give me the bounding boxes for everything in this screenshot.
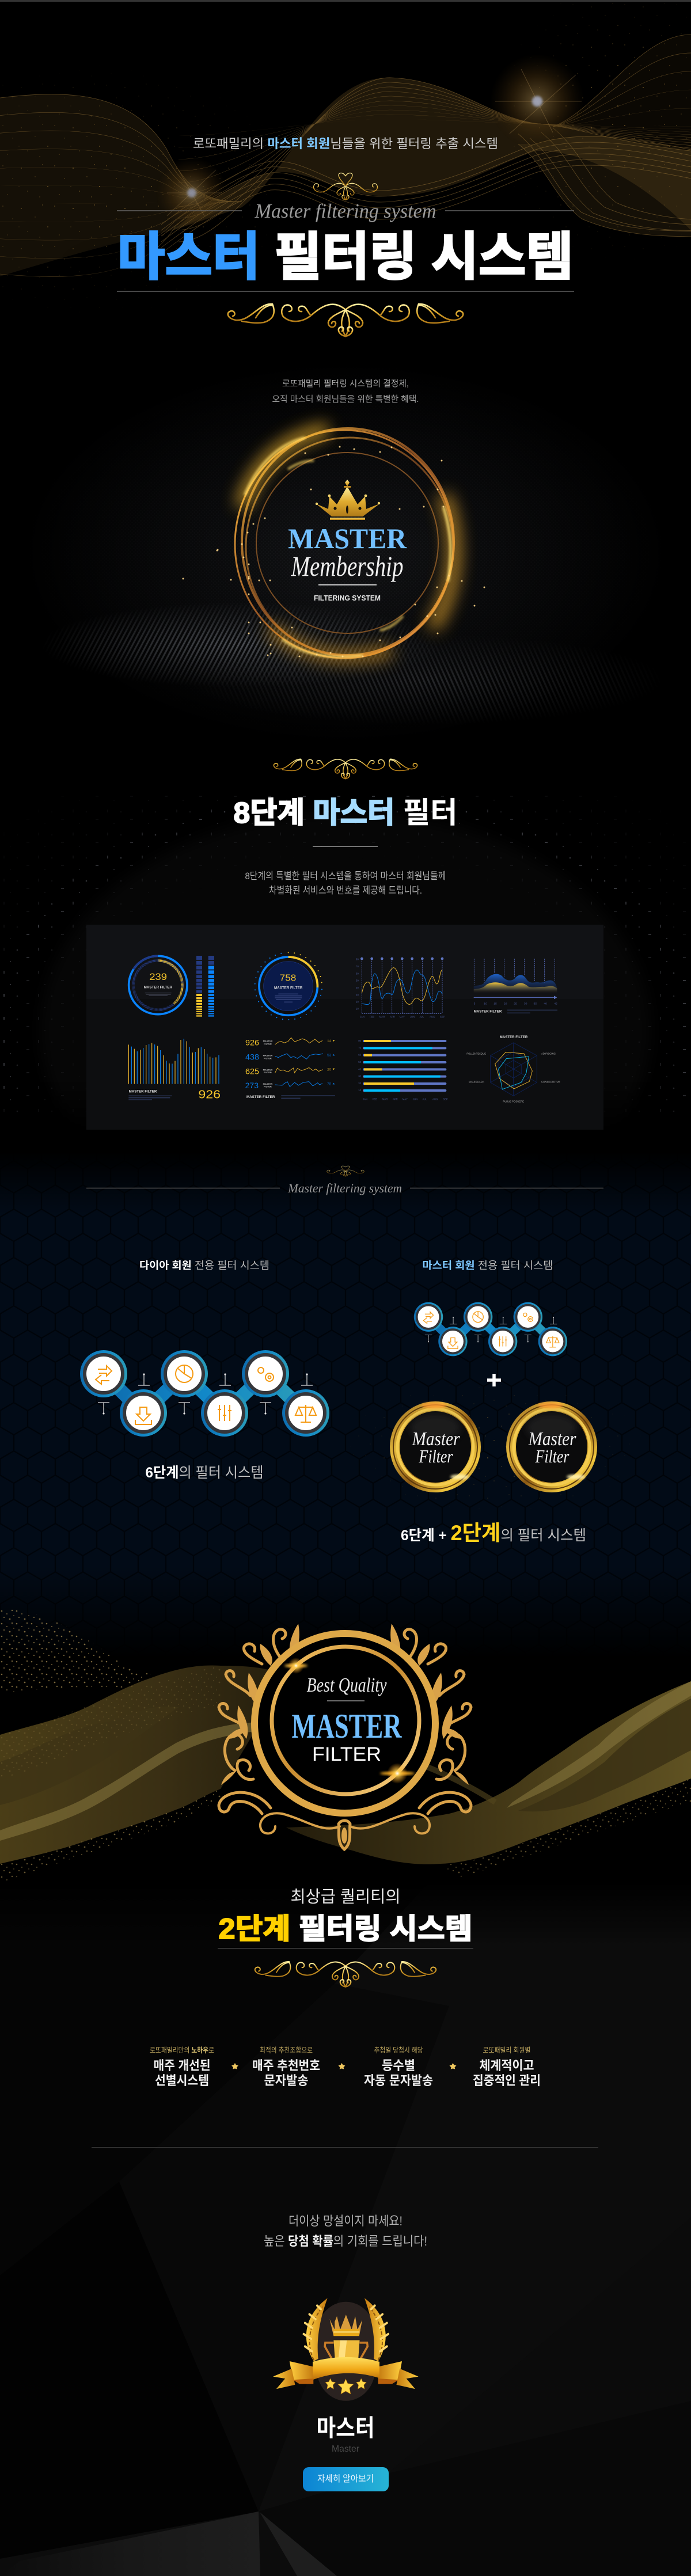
feature: automatic rank messages <box>364 2046 433 2088</box>
laurel wreath <box>303 2298 388 2361</box>
sparklines: 926 <box>245 1038 259 1047</box>
heading: master member filter: 마스터 회원 전용 필터 시스템 <box>423 1260 553 1271</box>
medallion: Master Filter right: Filter <box>535 1446 569 1466</box>
donut gauge 758: 758 <box>280 974 296 983</box>
gold ribbon waves <box>0 1606 691 1883</box>
icon: star <box>449 2063 456 2069</box>
label: Master: Master <box>332 2444 360 2454</box>
sparklines: MASTER <box>263 1040 273 1043</box>
medallion: Master Filter left: Filter <box>419 1446 453 1466</box>
Best Quality: Best Quality <box>306 1674 387 1696</box>
feature: weekly numbers: 문자발송 <box>264 2073 309 2088</box>
radar chart: MASTER FILTER <box>500 1035 528 1039</box>
heading: diamond member filter: 다이아 회원 전용 필터 시스템 <box>139 1260 269 1271</box>
sparklines: 78 <box>327 1082 332 1086</box>
multi-line chart: SEP <box>440 1016 445 1019</box>
multi-line chart: 40 <box>356 986 359 989</box>
subtitle: Master filtering system: Master filtering system <box>255 200 436 222</box>
feature: weekly improved selection: 매주 개선된 <box>153 2058 211 2073</box>
frame flourishes <box>219 1624 471 1849</box>
crown <box>316 480 380 520</box>
sparklines: FILTER <box>264 1085 272 1088</box>
light flare left <box>156 157 227 229</box>
description paragraph: 8단계의 특별한 필터 시스템을 통하여 마스터 회원님들께 <box>245 871 446 882</box>
horizontal progress bars: APR <box>393 1098 398 1101</box>
heading underline <box>313 846 378 847</box>
horizontal progress bars: 70 <box>358 1046 362 1049</box>
sparklines: MASTER <box>263 1054 273 1057</box>
sparklines: MASTER FILTER <box>246 1095 275 1099</box>
call-out text: 더이상 망설이지 마세요! <box>288 2214 403 2228</box>
title underline <box>117 291 574 292</box>
feature: weekly numbers: 최적의 추천조합으로 <box>260 2046 313 2054</box>
heading: top quality: 최상급 퀄리티의 <box>290 1888 401 1906</box>
horizontal progress bars: 10 <box>358 1089 362 1092</box>
horizontal progress bars: 50 <box>358 1061 362 1063</box>
sparklines: MASTER <box>263 1068 273 1071</box>
sparks <box>183 447 484 656</box>
badge: master trophy <box>273 2298 419 2401</box>
area chart: 20 <box>504 1002 507 1006</box>
horizontal progress bars: JAN <box>363 1098 367 1101</box>
horizontal progress bars: 20 <box>358 1082 362 1085</box>
feature: systematic management <box>473 2046 541 2088</box>
vertical line bars: MASTER FILTER <box>129 1089 157 1093</box>
ornament: small gold flourish <box>314 173 377 200</box>
multi-line chart: 50 <box>356 979 359 982</box>
feature list <box>150 2046 541 2088</box>
sparkle dust around medallions <box>350 1385 630 1509</box>
feature: weekly improved selection: 선별시스템 <box>155 2073 209 2088</box>
outer oval <box>255 1633 435 1813</box>
multi-line chart: JAN <box>360 1016 365 1019</box>
ornament: small flourish <box>327 1166 364 1176</box>
logotype: Membership: Membership <box>291 550 403 582</box>
glint bottom <box>380 1763 415 1784</box>
multi-line chart: JUL <box>419 1016 424 1019</box>
diagram: small 6-step filter chain <box>414 1302 567 1356</box>
sparklines: 625 <box>245 1066 259 1076</box>
intro paragraph: membership: 로또패밀리 필터링 시스템의 결정체, <box>282 379 409 389</box>
intro paragraph: membership <box>272 379 419 404</box>
sparklines: 53 <box>327 1054 332 1058</box>
caption: 6 + 2 step filter: 6단계 + 2단계의 필터 시스템 <box>401 1521 586 1545</box>
icon: star <box>339 2063 346 2069</box>
label: 마스터: 마스터 <box>317 2415 374 2441</box>
sparklines: 273 <box>245 1081 259 1090</box>
multi-line chart <box>356 958 445 1019</box>
horizontal progress bars <box>358 1039 448 1101</box>
multi-line chart: JUN <box>410 1016 415 1019</box>
sparklines <box>245 1038 335 1099</box>
divider <box>92 2147 598 2148</box>
icon: star <box>231 2063 238 2069</box>
horizontal progress bars: 80 <box>358 1039 362 1042</box>
logotype: filtering system: FILTERING SYSTEM <box>314 594 381 602</box>
hexagon section background <box>0 1152 691 1658</box>
crown <box>329 2315 362 2336</box>
medallion: Master Filter right <box>506 1401 597 1492</box>
radar chart: POLLENTESQUE <box>466 1052 486 1055</box>
multi-line chart: AUG <box>430 1016 435 1019</box>
donut gauge 239: 239 <box>149 971 167 982</box>
radar chart: MALESUADA <box>469 1080 484 1083</box>
area chart: 10 <box>484 1002 487 1006</box>
multi-line chart: MAY <box>400 1016 405 1019</box>
area chart: 25 <box>514 1002 517 1006</box>
section: hero background with gold wave mesh <box>0 0 691 345</box>
area chart: 40 <box>544 1002 547 1006</box>
intro line: 로또패밀리의 마스터 회원님들을 위한 필터링 추출 시스템 <box>193 136 498 151</box>
feature: weekly improved selection: 로또패밀리만의 노하우로 <box>150 2046 214 2054</box>
horizontal progress bars: FEB <box>373 1098 377 1101</box>
horizontal progress bars: JUL <box>422 1098 427 1101</box>
ornament: flourish <box>255 1962 436 1987</box>
glint top <box>284 1658 307 1674</box>
caption: 6-step filter: 6단계의 필터 시스템 <box>145 1465 264 1481</box>
radar chart: ADIPISCING <box>541 1052 556 1055</box>
heading: 8단계 마스터 필터: 8단계 마스터 필터 <box>234 796 457 829</box>
multi-line chart: 70 <box>356 965 359 968</box>
donut gauge 239: MASTER FILTER <box>144 985 172 989</box>
area chart: 30 <box>524 1002 527 1006</box>
inner oval <box>272 1647 419 1794</box>
MASTER: MASTER <box>291 1707 402 1745</box>
multi-line chart: 80 <box>356 958 359 961</box>
call-out text: 높은 당첨 확률의 기회를 드립니다! <box>264 2234 427 2248</box>
logotype divider <box>318 584 377 586</box>
multi-line chart: APR <box>390 1016 395 1019</box>
feature: automatic rank messages: 추첨일 당첨시 해당 <box>374 2046 423 2054</box>
radar chart <box>466 1035 560 1103</box>
horizontal progress bars: 60 <box>358 1054 362 1057</box>
area chart <box>474 959 557 1014</box>
horizontal progress bars: 30 <box>358 1075 362 1078</box>
area chart: 15 <box>493 1002 497 1006</box>
multi-line chart: 60 <box>356 972 359 975</box>
ornament: section flourish <box>274 759 417 779</box>
feature: systematic management: 집중적인 관리 <box>473 2073 541 2088</box>
feature: automatic rank messages: 자동 문자발송 <box>364 2073 433 2088</box>
sparklines: 20 <box>327 1068 332 1072</box>
call-out text <box>264 2214 427 2248</box>
area chart: 45 <box>554 1002 557 1006</box>
button: learn more <box>303 2467 389 2491</box>
sparklines: MASTER <box>263 1082 273 1085</box>
sparklines: FILTER <box>264 1071 272 1074</box>
horizontal progress bars: SEP <box>443 1098 448 1101</box>
FILTER: FILTER <box>312 1743 381 1765</box>
left half of dashboard <box>128 952 335 1101</box>
multi-line chart: FEB <box>370 1016 374 1019</box>
button: learn more: 자세히 알아보기 <box>317 2474 374 2484</box>
feature: weekly numbers <box>252 2046 320 2088</box>
donut gauge 239 <box>129 956 187 1015</box>
dotted arc background <box>3 796 686 1112</box>
stars <box>325 2379 366 2394</box>
heading: 2-step filtering system: 2단계 필터링 시스템 <box>219 1913 472 1945</box>
horizontal progress bars: 40 <box>358 1067 362 1070</box>
description paragraph <box>245 871 446 896</box>
feature: automatic rank messages: 등수별 <box>382 2058 415 2073</box>
feature: systematic management: 체계적이고 <box>479 2058 534 2073</box>
diagram: 6-step filter chain <box>80 1350 329 1437</box>
ornate gold frame emblem <box>219 1624 471 1849</box>
medallion: Master Filter left <box>390 1401 481 1492</box>
background: carbon texture and dotted wave <box>63 379 612 719</box>
badge backing <box>317 2302 375 2401</box>
right half of dashboard <box>356 958 560 1103</box>
radar chart: PURUS POSUERE <box>503 1100 524 1103</box>
feature: weekly numbers: 매주 추천번호 <box>252 2058 320 2073</box>
section divider: Master filtering system: Master filtering system <box>287 1181 402 1195</box>
logotype: MASTER: MASTER <box>288 522 407 554</box>
vertical line bars <box>128 1039 221 1101</box>
plus sign <box>487 1374 501 1386</box>
area chart: 5 <box>474 1002 476 1006</box>
horizontal progress bars: AUG <box>432 1098 438 1101</box>
horizontal progress bars: MAY <box>403 1098 408 1101</box>
area chart: MASTER FILTER <box>474 1010 502 1014</box>
vertical line bars: 926 <box>198 1088 221 1101</box>
glowing rings <box>235 428 454 658</box>
ribbon <box>273 2357 419 2389</box>
golden rings badge <box>183 428 484 658</box>
segmented level bars <box>196 956 214 1017</box>
title: 마스터 필터링 시스템 <box>117 229 574 286</box>
area chart: 35 <box>534 1002 537 1006</box>
multi-line chart: 30 <box>356 993 359 996</box>
sparklines: 14 <box>327 1039 332 1043</box>
feature: weekly improved selection <box>150 2046 214 2088</box>
medallion: Master Filter right: Master <box>528 1428 576 1450</box>
multi-line chart: 20 <box>356 1001 359 1004</box>
horizontal progress bars: JUN <box>413 1098 417 1101</box>
lower section faceted background <box>0 1883 691 2576</box>
description paragraph: 차별화된 서비스와 번호를 제공해 드립니다. <box>269 885 422 896</box>
intro paragraph: membership: 오직 마스터 회원님들을 위한 특별한 혜택. <box>272 394 419 404</box>
feature: systematic management: 로또패밀리 회원별 <box>483 2046 531 2054</box>
sparklines: FILTER <box>264 1057 272 1059</box>
ornament: large gold flourish <box>228 304 463 336</box>
radar chart: CONSECTETUR <box>541 1080 560 1083</box>
light flare right <box>490 54 584 149</box>
donut gauge 758: MASTER FILTER <box>274 986 303 990</box>
sparklines: FILTER <box>264 1042 272 1045</box>
medallion: Master Filter left: Master <box>412 1428 460 1450</box>
panel: dashboard charts <box>86 925 603 1130</box>
donut gauge 758 <box>255 952 322 1020</box>
horizontal progress bars: MAR <box>382 1098 388 1101</box>
multi-line chart: 10 <box>356 1008 359 1010</box>
multi-line chart: MAR <box>379 1016 385 1019</box>
trophy <box>325 2340 367 2359</box>
sparklines: 438 <box>245 1053 259 1062</box>
